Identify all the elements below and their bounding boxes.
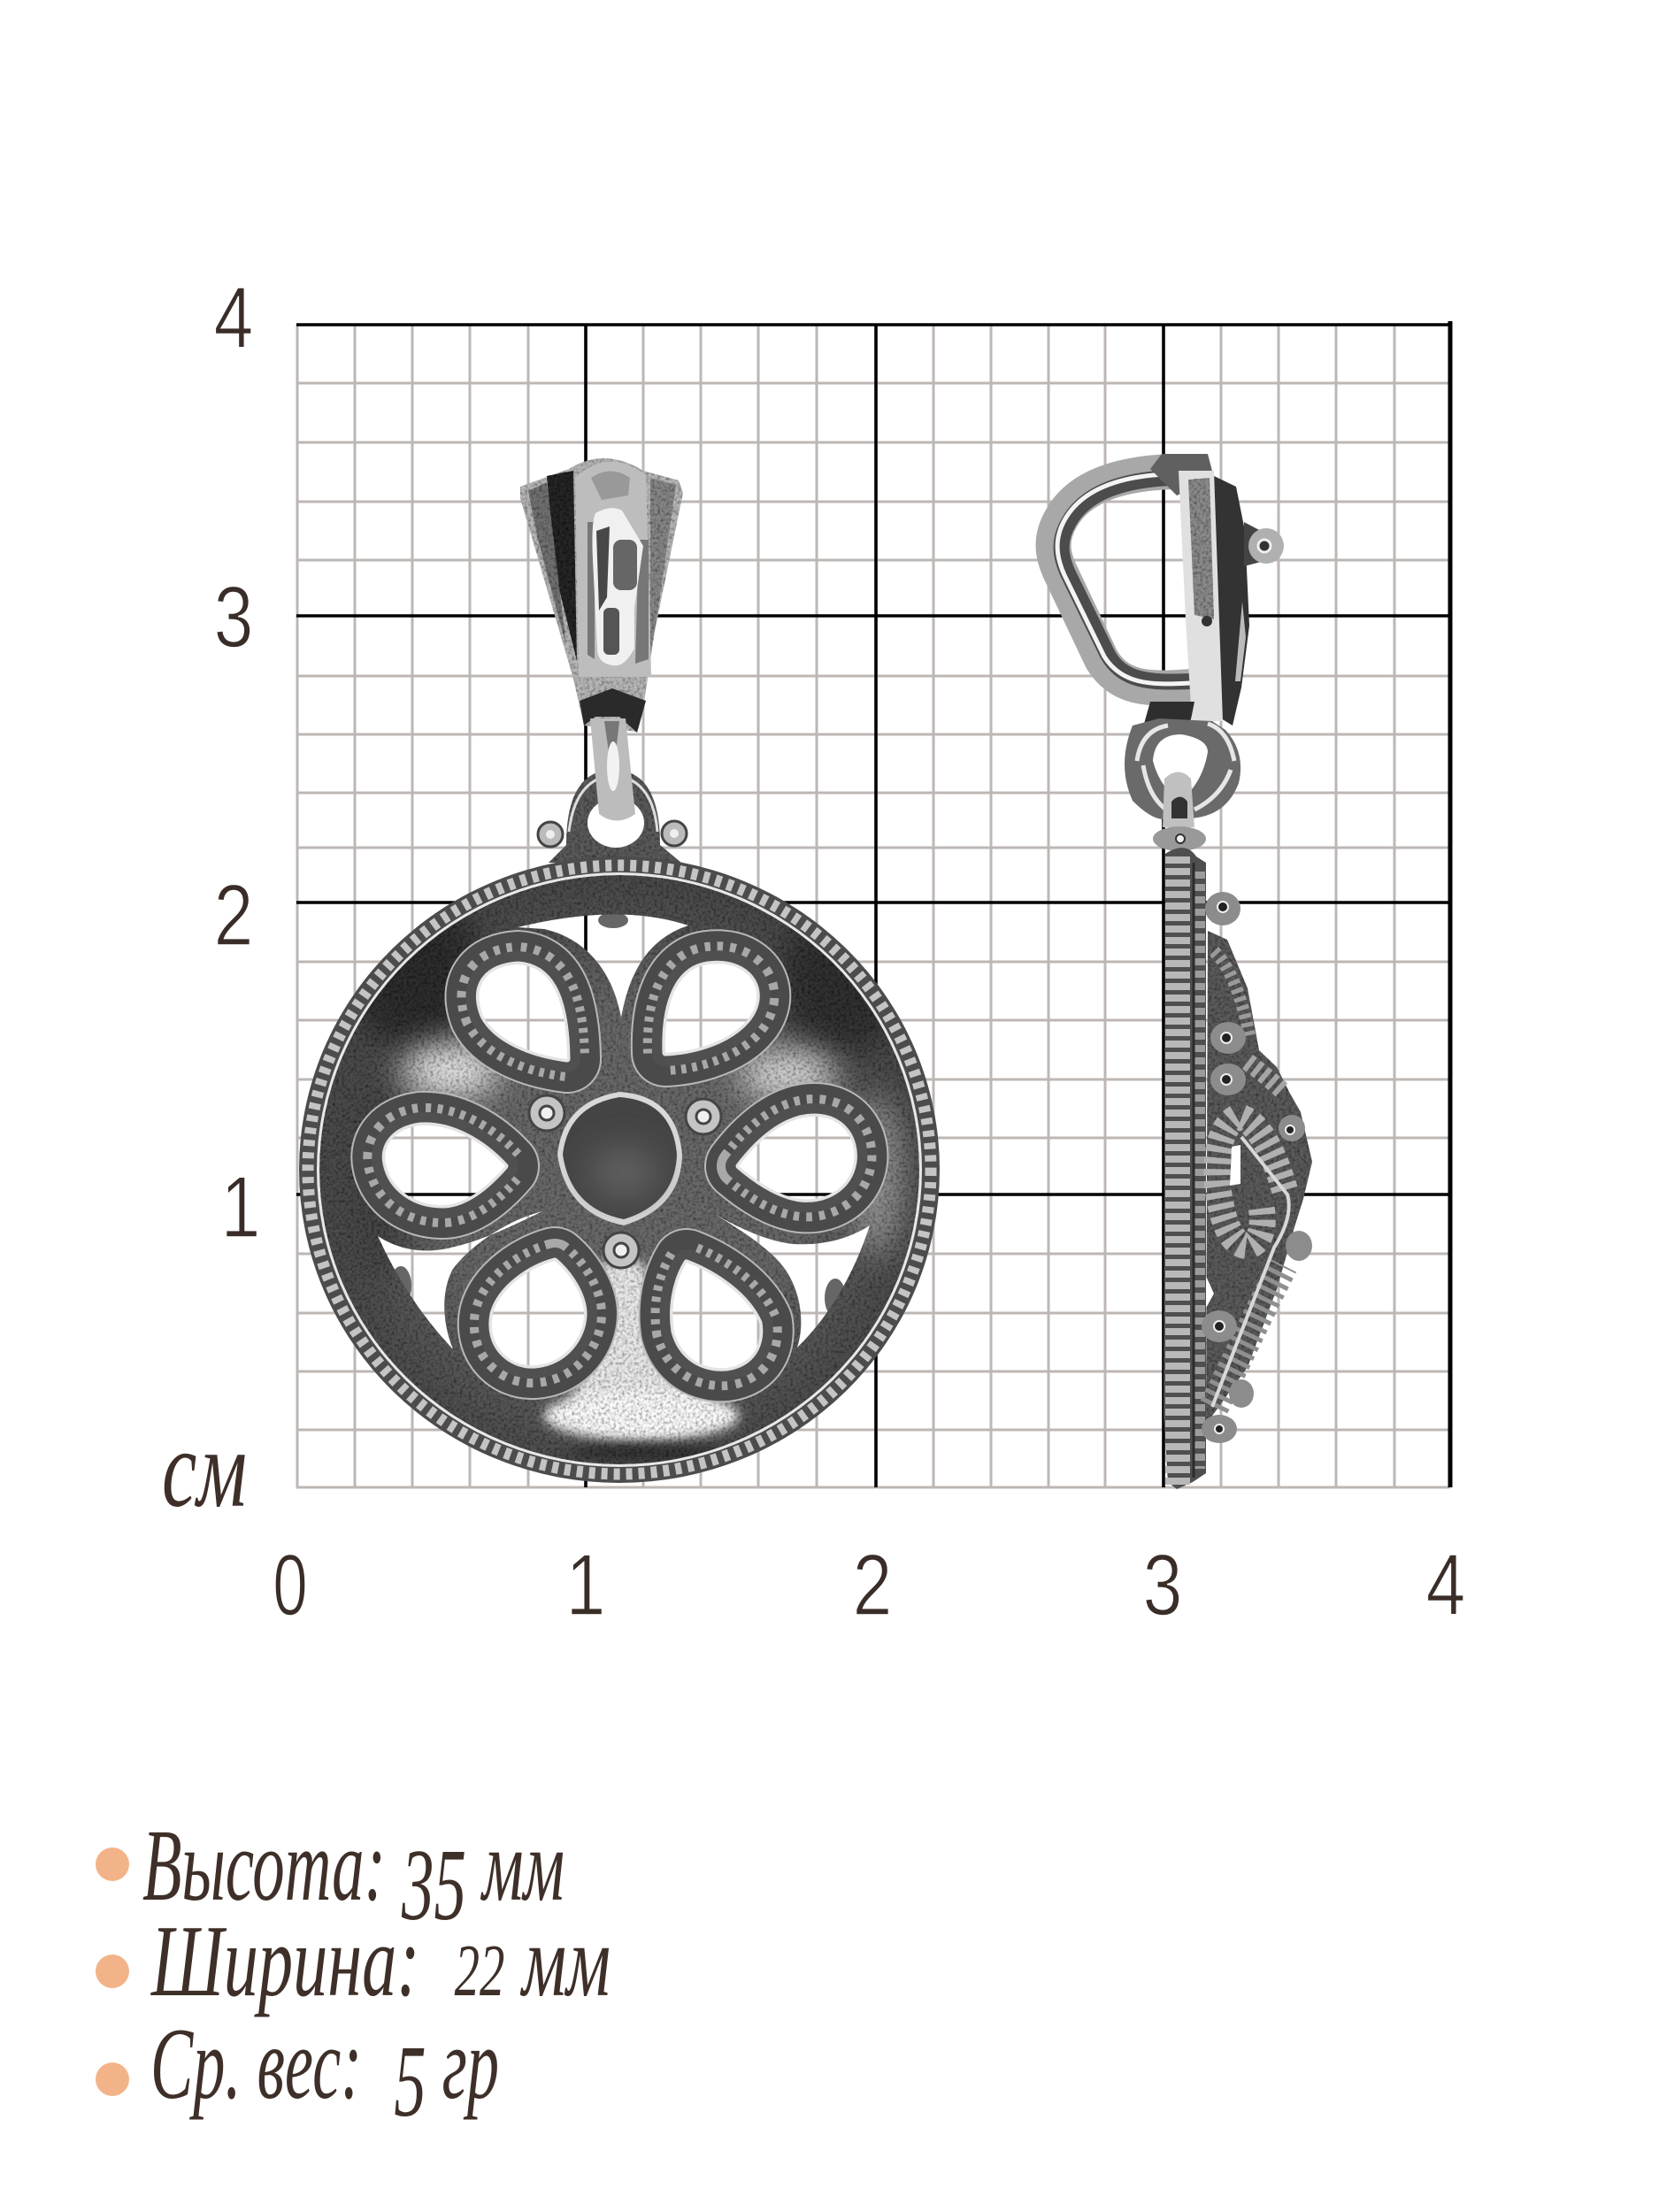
centre setting <box>557 1092 682 1225</box>
back bumps <box>390 912 846 1317</box>
side petals <box>1206 931 1312 1425</box>
bail centre panel <box>575 462 651 733</box>
y-axis labels <box>214 269 260 1256</box>
bullet: height <box>96 1847 129 1881</box>
height text: 35 <box>401 1829 466 1942</box>
outer rope rim <box>299 856 940 1483</box>
weight text: 5 <box>394 2025 426 2139</box>
pendant front view <box>299 458 940 1483</box>
y-axis labels: 1 <box>221 1158 260 1256</box>
x-axis labels: 2 <box>853 1536 892 1633</box>
height text: Высота: <box>142 1809 530 1923</box>
jump ring and attachment <box>538 718 687 863</box>
granule beads <box>529 1095 721 1268</box>
unit label: см <box>162 1409 247 1531</box>
side bead <box>1244 522 1284 566</box>
side beads <box>1202 892 1312 1443</box>
side disc edge <box>1164 848 1206 1489</box>
bail front <box>520 458 683 732</box>
weight text: Ср. вес: <box>150 2008 490 2121</box>
x-axis labels <box>273 1536 1465 1634</box>
side bail loop <box>1054 472 1190 688</box>
dish <box>319 875 919 1464</box>
x-axis labels: 3 <box>1143 1536 1182 1633</box>
y-axis labels: 4 <box>214 269 253 366</box>
pendant side view <box>1054 454 1312 1489</box>
height text: мм <box>466 1809 565 1923</box>
x-axis labels: 0 <box>273 1538 308 1634</box>
width text: Ширина: 22 мм <box>150 1905 611 2018</box>
side small ring <box>1125 718 1240 851</box>
y-axis labels: 2 <box>214 866 253 964</box>
bullet: weight <box>96 2062 129 2096</box>
side bail bar <box>1144 454 1249 726</box>
measurement grid <box>296 321 1450 1487</box>
x-axis labels: 4 <box>1426 1536 1465 1633</box>
bullet: width <box>96 1955 129 1988</box>
x-axis labels: 1 <box>566 1536 605 1633</box>
weight text: гр <box>426 2008 499 2121</box>
spec list <box>96 1809 611 2139</box>
y-axis labels: 3 <box>214 568 253 665</box>
disc <box>299 856 940 1483</box>
rope petals <box>385 964 854 1368</box>
